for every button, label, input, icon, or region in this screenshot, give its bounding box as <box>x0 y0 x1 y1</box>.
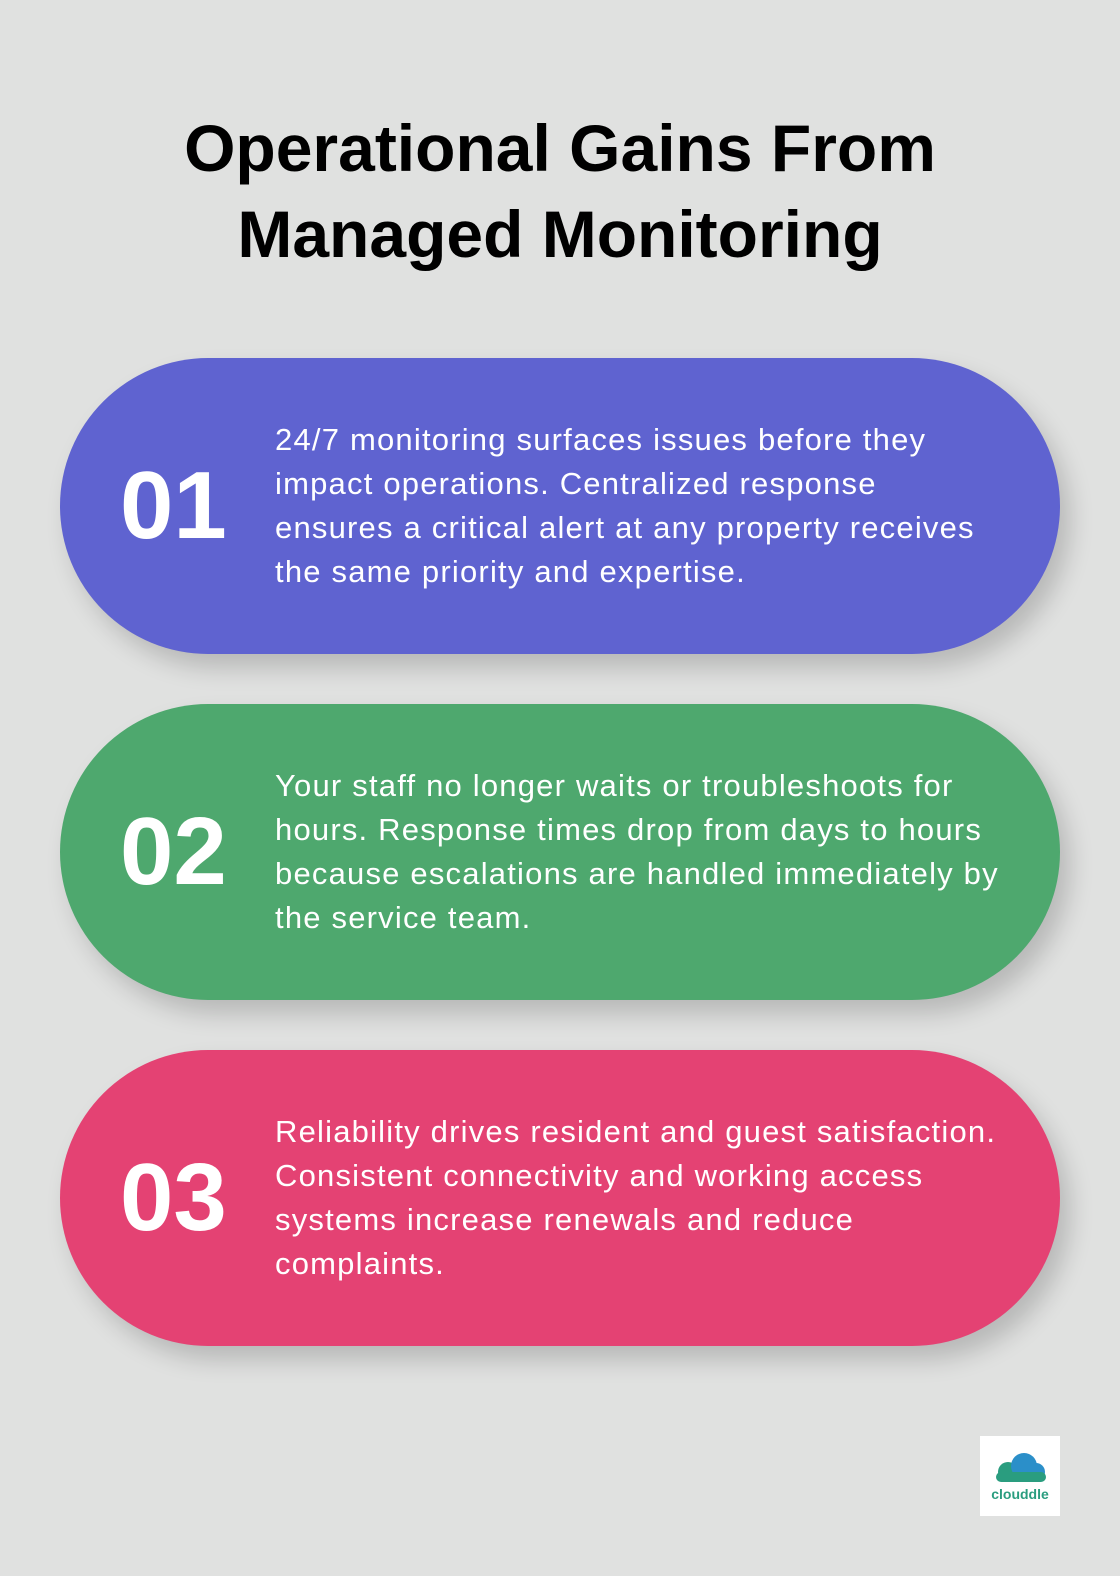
logo text: clouddle <box>991 1486 1049 1502</box>
text 01: ensures a critical alert at any property receives <box>275 510 975 545</box>
number 01: 01 <box>120 452 227 559</box>
panel: 02 <box>60 704 1060 1000</box>
panel: 01 <box>60 358 1060 654</box>
icon: cloud <box>996 1453 1046 1482</box>
panel: 03 <box>60 1050 1060 1346</box>
text 02: the service team. <box>275 900 531 935</box>
text 02: Your staff no longer waits or troubleshoots for <box>275 768 954 803</box>
text 01: the same priority and expertise. <box>275 554 746 589</box>
text 02: hours. Response times drop from days to hours <box>275 812 982 847</box>
text 02 <box>275 768 999 935</box>
logo <box>980 1436 1060 1516</box>
title: Managed Monitoring <box>237 197 883 271</box>
number 02: 02 <box>120 798 227 905</box>
title <box>184 111 936 271</box>
title: Operational Gains From <box>184 111 936 185</box>
text 03 <box>275 1114 996 1281</box>
text 03: Consistent connectivity and working access <box>275 1158 923 1193</box>
text 03: complaints. <box>275 1246 445 1281</box>
text 01: impact operations. Centralized response <box>275 466 877 501</box>
text 01: 24/7 monitoring surfaces issues before they <box>275 422 926 457</box>
text 03: Reliability drives resident and guest satisfaction. <box>275 1114 996 1149</box>
text 01 <box>275 422 975 589</box>
text 02: because escalations are handled immediately by <box>275 856 999 891</box>
text 03: systems increase renewals and reduce <box>275 1202 854 1237</box>
number 03: 03 <box>120 1144 227 1251</box>
